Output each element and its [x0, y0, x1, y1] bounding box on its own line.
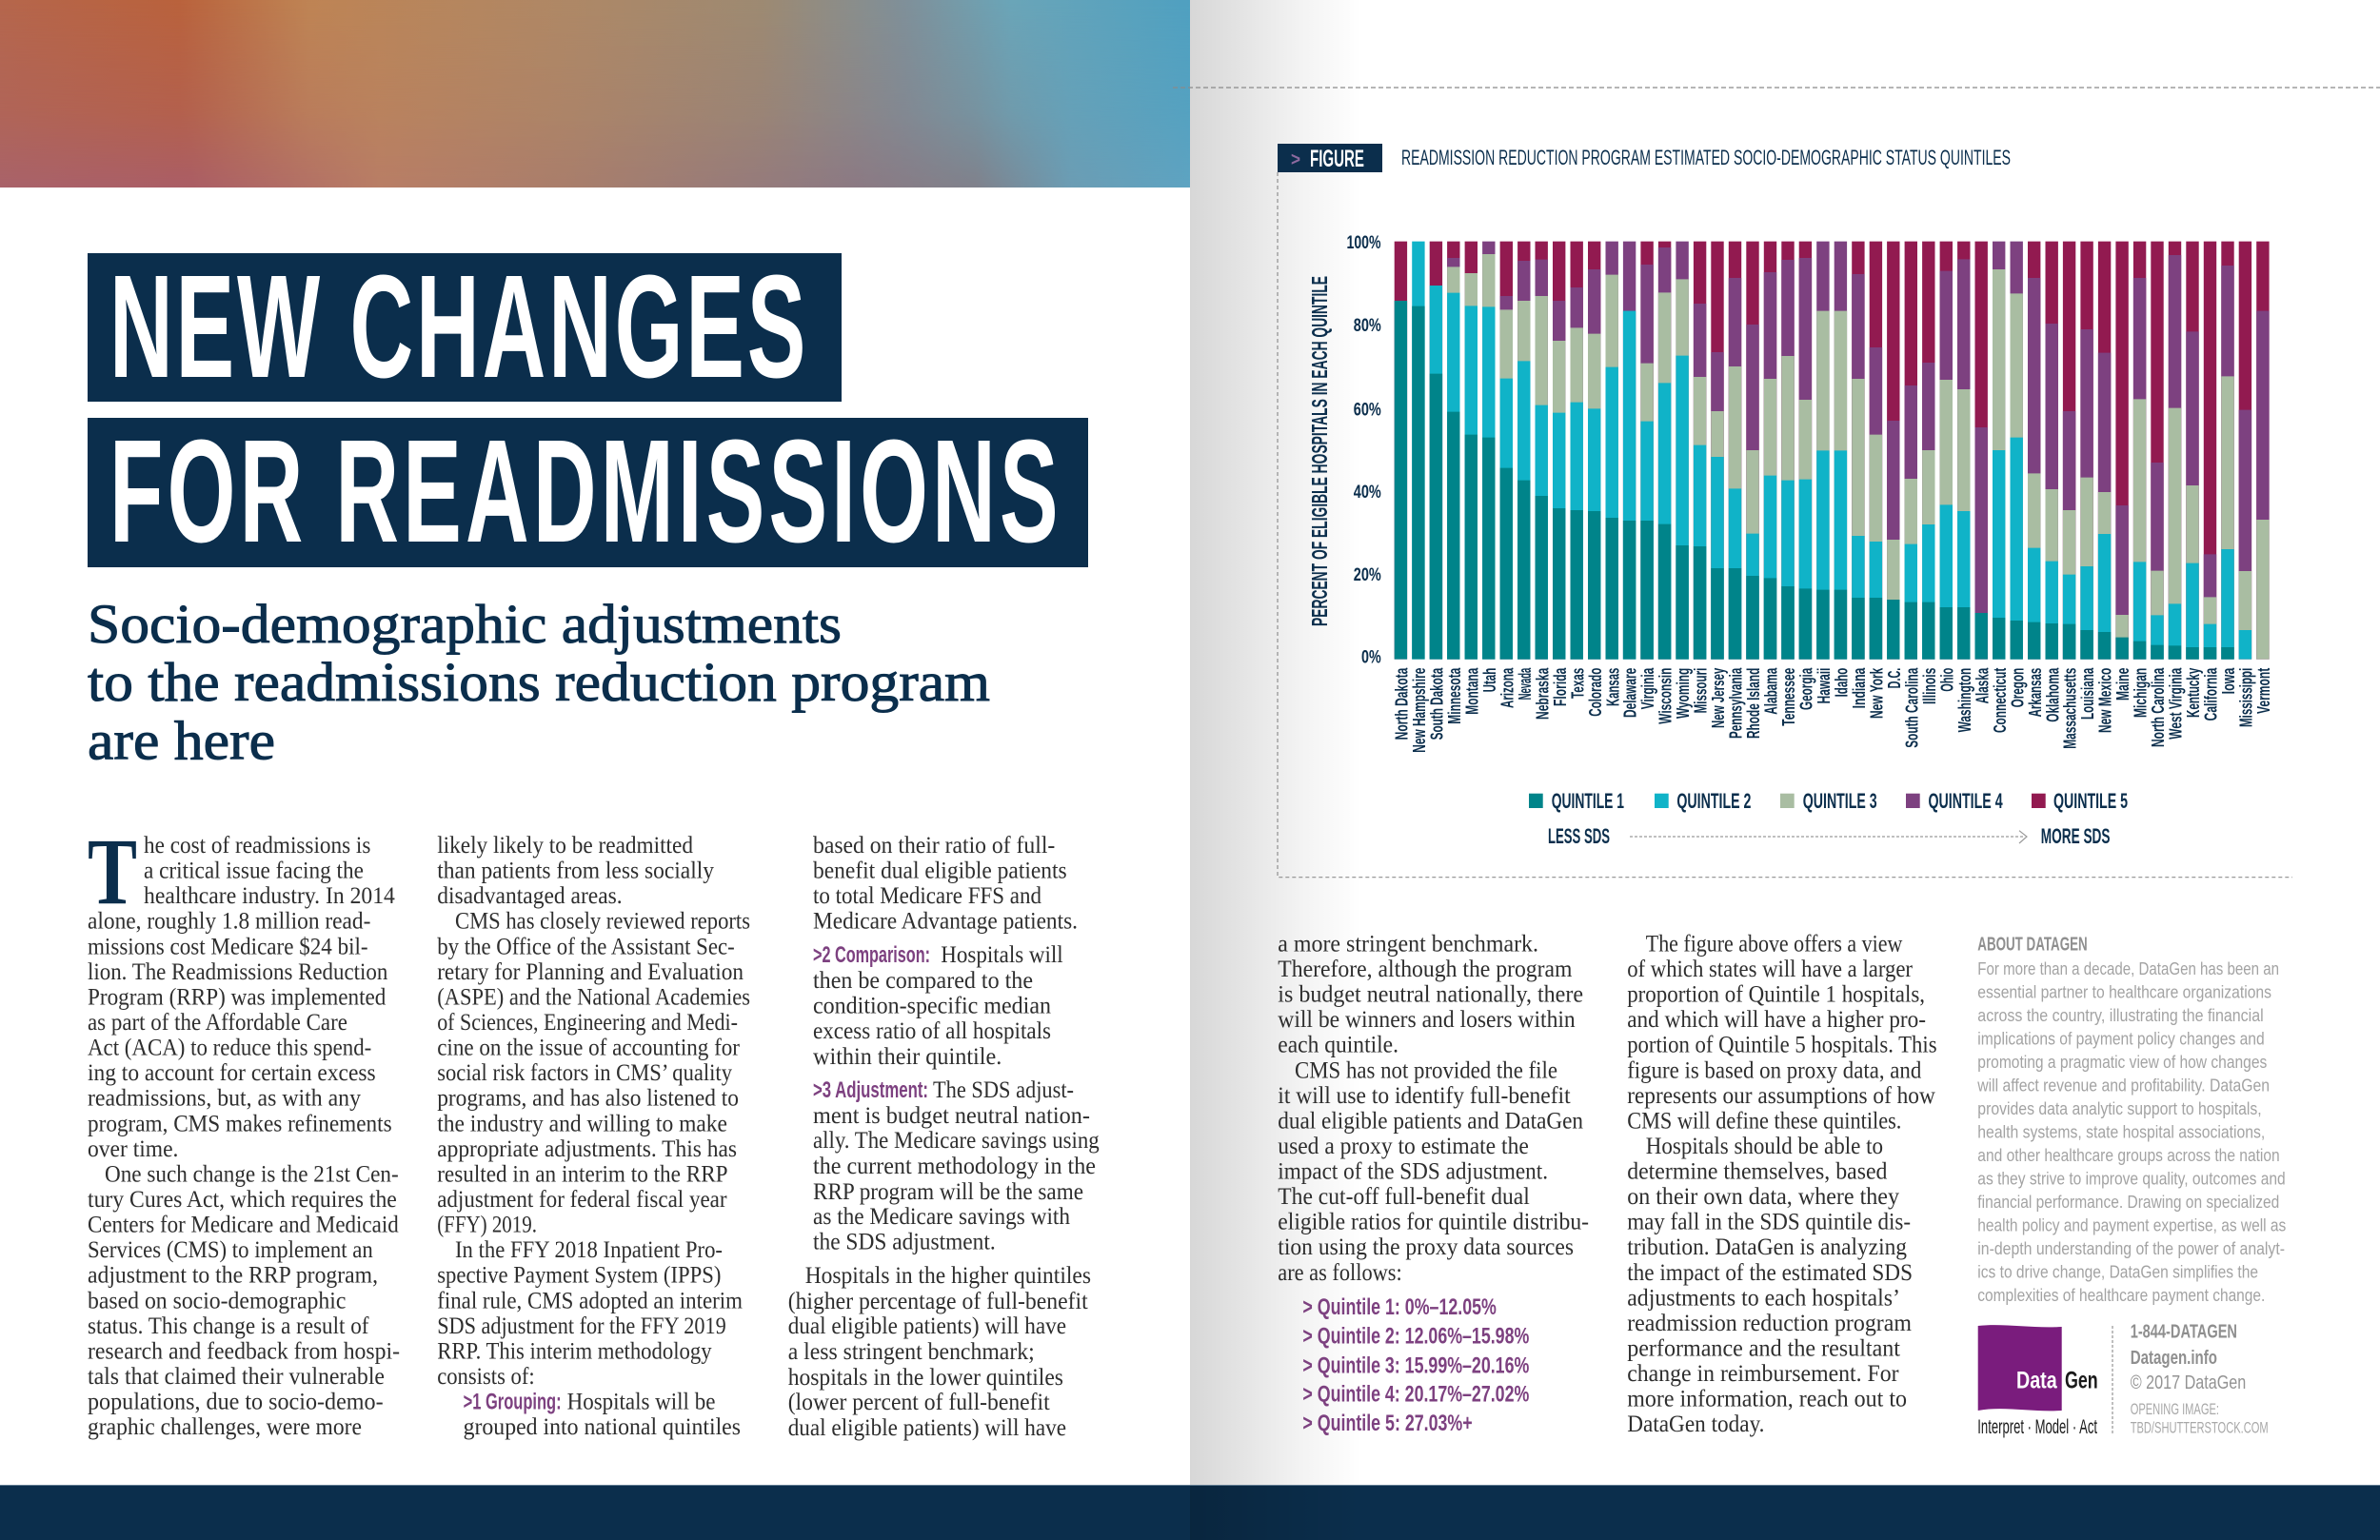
article column 1: tury Cures Act, which requires the	[88, 1187, 397, 1213]
article column 3: dual eligible patients) will have	[788, 1415, 1066, 1441]
state labels: Rhode Island	[1744, 668, 1763, 739]
bar: Alaska	[1974, 242, 1988, 660]
article column 1: over time.	[88, 1136, 178, 1162]
right page text column A: dual eligible patients and DataGen	[1278, 1108, 1583, 1134]
state labels: Minnesota	[1445, 667, 1464, 724]
right page text column A: a more stringent benchmark.	[1278, 931, 1538, 957]
right page text column B: more information, reach out to	[1627, 1387, 1907, 1412]
right page text column A: tion using the proxy data sources	[1278, 1234, 1574, 1260]
state labels: Oklahoma	[2043, 667, 2062, 722]
right page text column A: The cut-off full-benefit dual	[1278, 1184, 1530, 1210]
DataGen logo	[1977, 1325, 2098, 1438]
about body text: essential partner to healthcare organizations	[1977, 982, 2271, 1001]
article column 1: readmissions, but, as with any	[88, 1086, 361, 1112]
bar: Oklahoma	[2045, 242, 2058, 660]
article column 2: disadvantaged areas.	[437, 883, 623, 909]
article column 3: as the Medicare savings with	[813, 1204, 1070, 1230]
state labels: Wisconsin	[1656, 668, 1676, 724]
about body text: financial performance. Drawing on specialized	[1977, 1193, 2279, 1212]
quintile ranges list	[1302, 1294, 1529, 1436]
about body text: will affect revenue and profitability. DataGen	[1976, 1076, 2270, 1095]
quintile ranges list: > Quintile 1: 0%–12.05%	[1302, 1294, 1497, 1320]
bar: Nevada	[1517, 242, 1531, 660]
y axis labels: 0%	[1361, 648, 1381, 668]
state labels: Virginia	[1638, 667, 1657, 709]
bar: North Dakota	[1395, 242, 1407, 660]
article column 2: RRP. This interim methodology	[437, 1338, 712, 1364]
bar: Washington	[1957, 242, 1971, 660]
state labels: Florida	[1551, 667, 1570, 706]
legend: QUINTILE 1	[1552, 789, 1624, 813]
article column 1: ing to account for certain excess	[88, 1060, 376, 1086]
figure frame	[1278, 172, 2292, 878]
article column 3: RRP program will be the same	[813, 1179, 1083, 1205]
header image band	[0, 0, 1190, 188]
right page text column A: will be winners and losers within	[1278, 1007, 1576, 1033]
contact details: TBD/SHUTTERSTOCK.COM	[2131, 1419, 2269, 1437]
right page text column A: it will use to identify full-benefit	[1278, 1083, 1571, 1109]
about body text: across the country, illustrating the financial	[1977, 1006, 2264, 1025]
article column 2: retary for Planning and Evaluation	[437, 959, 744, 985]
article column 2: SDS adjustment for the FFY 2019	[437, 1313, 726, 1339]
about body text: ics to drive change, DataGen simplifies the	[1977, 1262, 2258, 1281]
SDS scale arrow: MORE SDS	[2041, 824, 2110, 848]
legend: QUINTILE 3	[1803, 789, 1877, 813]
state labels: Louisiana	[2078, 667, 2097, 720]
state labels: North Carolina	[2149, 667, 2168, 747]
quintile ranges list: > Quintile 4: 20.17%–27.02%	[1302, 1382, 1529, 1407]
legend: QUINTILE 2	[1676, 789, 1751, 813]
right page text column B: CMS will define these quintiles.	[1627, 1108, 1901, 1134]
about body text: in-depth understanding of the power of analyt-	[1977, 1239, 2285, 1258]
article column 1: alone, roughly 1.8 million read-	[88, 909, 370, 935]
bar: Rhode Island	[1746, 242, 1759, 660]
article column 3: hospitals in the lower quintiles	[788, 1365, 1063, 1391]
state labels: West Virginia	[2167, 667, 2186, 740]
state labels: New Mexico	[2096, 668, 2115, 733]
bottom navy band	[0, 1485, 2380, 1540]
bar: Louisiana	[2080, 242, 2093, 660]
article column 2: consists of:	[437, 1364, 535, 1390]
right page text column B: proportion of Quintile 1 hospitals,	[1627, 981, 1925, 1007]
state labels: New York	[1868, 667, 1887, 719]
article column 3: Medicare Advantage patients.	[813, 909, 1078, 935]
article column 1: status. This change is a result of	[88, 1313, 369, 1339]
about body text: provides data analytic support to hospitals,	[1977, 1099, 2262, 1118]
bar: Wisconsin	[1658, 242, 1671, 660]
article column 1: program, CMS makes refinements	[88, 1111, 392, 1136]
state labels: Illinois	[1920, 668, 1939, 704]
state labels: Mississippi	[2237, 668, 2256, 727]
article column 1: he cost of readmissions is	[144, 833, 370, 859]
article column 1: missions cost Medicare $24 bil-	[88, 934, 368, 959]
about body text	[1976, 959, 2286, 1305]
state labels: South Dakota	[1428, 667, 1447, 740]
SDS scale arrow	[1548, 824, 2110, 848]
article column 3: the current methodology in the	[813, 1154, 1096, 1179]
right page text column B: tribution. DataGen is analyzing	[1627, 1234, 1907, 1260]
bar: Mississippi	[2239, 242, 2251, 660]
state labels: Delaware	[1621, 668, 1640, 718]
right page text column B: DataGen today.	[1627, 1412, 1765, 1437]
article column 2: (FFY) 2019.	[437, 1213, 537, 1238]
article column 1: Centers for Medicare and Medicaid	[88, 1213, 399, 1238]
article column 3: (higher percentage of full-benefit	[788, 1289, 1088, 1314]
state labels: South Carolina	[1902, 667, 1921, 748]
bar: New Jersey	[1711, 242, 1724, 660]
title: FOR READMISSIONS	[109, 409, 1059, 573]
bar: West Virginia	[2169, 242, 2181, 660]
subtitle	[88, 593, 990, 772]
state labels: Indiana	[1850, 667, 1869, 708]
state labels	[1392, 667, 2273, 753]
about body text: health policy and payment expertise, as well as	[1977, 1215, 2286, 1234]
title: NEW CHANGES	[109, 245, 805, 408]
bar: Massachusetts	[2063, 242, 2075, 660]
state labels: Utah	[1480, 668, 1499, 692]
legend: QUINTILE 5	[2053, 789, 2128, 813]
quintile ranges list: > Quintile 5: 27.03%+	[1302, 1411, 1473, 1436]
article column 3: condition-specific median	[813, 994, 1051, 1019]
bar: New York	[1870, 242, 1882, 660]
state labels: Nevada	[1516, 667, 1535, 700]
right page text column A: is budget neutral nationally, there	[1278, 981, 1583, 1007]
article column 3: >2 Comparison:	[813, 942, 930, 968]
contact details: © 2017 DataGen	[2131, 1372, 2246, 1393]
bar: D.C.	[1887, 242, 1900, 660]
article column 3: to total Medicare FFS and	[813, 883, 1041, 909]
subtitle: are here	[88, 710, 275, 772]
article column 1: based on socio-demographic	[88, 1288, 346, 1313]
bar: Arkansas	[2028, 242, 2040, 660]
bar: South Dakota	[1430, 242, 1442, 660]
DataGen logo: Data	[2016, 1368, 2058, 1394]
bar: Ohio	[1940, 242, 1953, 660]
bar: Illinois	[1922, 242, 1935, 660]
about body text: and other healthcare groups across the nation	[1977, 1146, 2280, 1165]
article column 2: (ASPE) and the National Academies	[437, 984, 750, 1010]
right page text column B: and which will have a higher pro-	[1627, 1007, 1926, 1033]
right page text column B: The figure above offers a view	[1646, 931, 1902, 957]
bar: Colorado	[1588, 242, 1600, 660]
article column 1: Act (ACA) to reduce this spend-	[88, 1036, 371, 1061]
article column 1: populations, due to socio-demo-	[88, 1390, 384, 1414]
bar: Missouri	[1694, 242, 1706, 660]
bar: California	[2204, 242, 2216, 660]
state labels: Pennsylvania	[1727, 667, 1746, 739]
about body text: promoting a pragmatic view of how changes	[1977, 1053, 2267, 1072]
state labels: New Jersey	[1709, 668, 1728, 728]
legend	[1529, 789, 2128, 813]
article column 2: Hospitals will be	[567, 1390, 715, 1414]
bar: Pennsylvania	[1729, 242, 1741, 660]
right page text column B: on their own data, where they	[1627, 1184, 1899, 1210]
right page text column B: may fall in the SDS quintile dis-	[1627, 1210, 1911, 1235]
article column 2: the industry and willing to make	[437, 1111, 727, 1136]
bar: Connecticut	[1993, 242, 2005, 660]
subtitle: Socio-demographic adjustments	[88, 593, 842, 655]
article column 1: a critical issue facing the	[144, 859, 364, 884]
article column 2: cine on the issue of accounting for	[437, 1036, 741, 1061]
article column 2: In the FFY 2018 Inpatient Pro-	[455, 1237, 723, 1263]
article column 3: a less stringent benchmark;	[788, 1339, 1035, 1365]
article column 2: final rule, CMS adopted an interim	[437, 1288, 743, 1313]
contact details: 1-844-DATAGEN	[2131, 1321, 2237, 1343]
right page text column B: the impact of the estimated SDS	[1627, 1260, 1913, 1286]
y axis title: PERCENT OF ELIGIBLE HOSPITALS IN EACH QUINTILE	[1307, 276, 1332, 626]
bar: Minnesota	[1447, 242, 1460, 660]
state labels: Iowa	[2219, 667, 2238, 694]
bar: Kansas	[1605, 242, 1618, 660]
article column 3: benefit dual eligible patients	[813, 859, 1067, 884]
right page text column B: determine themselves, based	[1627, 1158, 1888, 1184]
y axis labels: 60%	[1354, 401, 1381, 421]
state labels: Kansas	[1603, 668, 1622, 706]
state labels: North Dakota	[1392, 667, 1411, 740]
bar: Maine	[2115, 242, 2129, 660]
state labels: Alaska	[1973, 667, 1992, 703]
state labels: Hawaii	[1815, 668, 1834, 703]
contact details	[2131, 1321, 2269, 1437]
figure tag: FIGURE	[1310, 147, 1364, 172]
bar: Georgia	[1799, 242, 1812, 660]
subtitle: to the readmissions reduction program	[88, 651, 990, 713]
article column 3: excess ratio of all hospitals	[813, 1018, 1051, 1044]
state labels: Arizona	[1497, 667, 1517, 708]
article column 3: the SDS adjustment.	[813, 1230, 996, 1255]
figure title: READMISSION REDUCTION PROGRAM ESTIMATED SOCIO-DEMOGRAPHIC STATUS QUINTILES	[1401, 146, 2011, 169]
bar: New Mexico	[2098, 242, 2111, 660]
DataGen logo: Interpret · Model · Act	[1977, 1416, 2097, 1438]
state labels: Wyoming	[1674, 668, 1693, 719]
state labels: Vermont	[2254, 668, 2273, 714]
article column 3: based on their ratio of full-	[813, 833, 1055, 859]
article column 1: graphic challenges, were more	[88, 1414, 362, 1440]
drop cap: T	[88, 819, 137, 924]
article column 3: ally. The Medicare savings using	[813, 1128, 1100, 1154]
about heading: ABOUT DATAGEN	[1977, 934, 2088, 956]
article column 1: tals that claimed their vulnerable	[88, 1364, 385, 1390]
article column 3: Hospitals will	[941, 942, 1063, 968]
article column 1: as part of the Affordable Care	[88, 1010, 347, 1036]
article column 2	[437, 833, 750, 1440]
y axis labels	[1346, 233, 1381, 668]
right page text column B: Hospitals should be able to	[1646, 1134, 1883, 1159]
quintile ranges list: > Quintile 2: 12.06%–15.98%	[1302, 1324, 1529, 1350]
bar: Iowa	[2221, 242, 2234, 660]
state labels: Nebraska	[1533, 667, 1552, 720]
bar: North Carolina	[2151, 242, 2164, 660]
article column 1: healthcare industry. In 2014	[144, 883, 395, 909]
bar: Florida	[1553, 242, 1565, 660]
DataGen logo: Gen	[2065, 1368, 2098, 1394]
contact details: Datagen.info	[2131, 1347, 2217, 1369]
right page text column A	[1278, 931, 1589, 1286]
bar: Delaware	[1623, 242, 1636, 660]
figure tag: >	[1291, 149, 1300, 170]
article column 2: >1 Grouping:	[464, 1390, 562, 1414]
right page text column A: used a proxy to estimate the	[1278, 1134, 1529, 1159]
state labels: California	[2202, 667, 2221, 721]
bar: Indiana	[1852, 242, 1865, 660]
figure panel	[1278, 144, 2292, 878]
state labels: Connecticut	[1991, 668, 2010, 733]
about body text: For more than a decade, DataGen has been an	[1977, 959, 2279, 978]
article column 3: >3 Adjustment:	[813, 1077, 928, 1103]
right page text column A: each quintile.	[1278, 1033, 1398, 1058]
article column 3: dual eligible patients) will have	[788, 1313, 1066, 1339]
state labels: Oregon	[2008, 668, 2027, 707]
article column 2: spective Payment System (IPPS)	[437, 1263, 722, 1289]
stacked bar chart	[1400, 242, 2263, 660]
right page text column A: eligible ratios for quintile distribu-	[1278, 1210, 1589, 1235]
contact details: OPENING IMAGE:	[2131, 1400, 2219, 1418]
article column 1: research and feedback from hospi-	[88, 1338, 400, 1364]
bar: Arizona	[1500, 242, 1513, 660]
article column 2: CMS has closely reviewed reports	[455, 909, 750, 935]
right page text column A: are as follows:	[1278, 1260, 1402, 1286]
state labels: Georgia	[1797, 667, 1816, 710]
right page text column B: readmission reduction program	[1627, 1311, 1913, 1336]
bar: South Carolina	[1905, 242, 1917, 660]
y axis labels: 80%	[1354, 316, 1381, 336]
article column 1	[88, 819, 400, 1440]
state labels: Idaho	[1832, 668, 1851, 697]
bar: Michigan	[2133, 242, 2146, 660]
state labels: Texas	[1568, 668, 1587, 699]
state labels: Ohio	[1937, 668, 1956, 692]
title	[88, 245, 1088, 573]
SDS scale arrow: LESS SDS	[1548, 824, 1610, 848]
y axis labels: 20%	[1354, 565, 1381, 585]
right page text column B: portion of Quintile 5 hospitals. This	[1627, 1033, 1937, 1058]
about body text: health systems, state hospital associations,	[1977, 1122, 2265, 1141]
right page text column B: adjustments to each hospitals’	[1627, 1285, 1900, 1311]
article column 1: Program (RRP) was implemented	[88, 984, 387, 1010]
article column 2: adjustment for federal fiscal year	[437, 1187, 727, 1213]
state labels: Michigan	[2132, 668, 2151, 718]
article column 2: programs, and has also listened to	[437, 1086, 739, 1112]
about DataGen block	[1976, 934, 2286, 1438]
state labels: Alabama	[1762, 667, 1781, 715]
article column 2: social risk factors in CMS’ quality	[437, 1060, 732, 1086]
right page text column B: represents our assumptions of how	[1627, 1083, 1935, 1109]
article column 2: likely likely to be readmitted	[437, 833, 693, 859]
article column 2: than patients from less socially	[437, 859, 714, 884]
state labels: Washington	[1955, 668, 1974, 732]
article column 3: The SDS adjust-	[933, 1077, 1074, 1103]
article column 1: adjustment to the RRP program,	[88, 1263, 378, 1289]
article column 1: One such change is the 21st Cen-	[105, 1161, 399, 1187]
bar: Montana	[1465, 242, 1478, 660]
about body text: as they strive to improve quality, outcomes and	[1977, 1169, 2286, 1188]
right page text column A: Therefore, although the program	[1278, 957, 1573, 982]
right page text column B: of which states will have a larger	[1627, 957, 1914, 982]
article column 2: of Sciences, Engineering and Medi-	[437, 1010, 738, 1036]
state labels: Colorado	[1586, 668, 1605, 717]
article column 2: by the Office of the Assistant Sec-	[437, 934, 735, 959]
bar: Wyoming	[1676, 242, 1689, 660]
y axis labels: 40%	[1354, 483, 1381, 503]
right page text column B: figure is based on proxy data, and	[1627, 1057, 1922, 1083]
article column 2: resulted in an interim to the RRP	[437, 1161, 728, 1187]
bar: Hawaii	[1816, 242, 1830, 660]
article column 3: ment is budget neutral nation-	[813, 1103, 1090, 1129]
article column 3: within their quintile.	[813, 1044, 1002, 1070]
figure tag	[1278, 144, 1382, 172]
bar: Nebraska	[1535, 242, 1548, 660]
bar: Virginia	[1640, 242, 1654, 660]
article column 1: lion. The Readmissions Reduction	[88, 959, 388, 985]
quintile ranges list: > Quintile 3: 15.99%–20.16%	[1302, 1353, 1529, 1378]
article column 3: Hospitals in the higher quintiles	[805, 1263, 1091, 1289]
bar: Oregon	[2010, 242, 2023, 660]
state labels: Massachusetts	[2061, 668, 2080, 749]
page gutter shadow	[1190, 0, 1361, 1485]
article column 1: Services (CMS) to implement an	[88, 1237, 373, 1263]
bar: Kentucky	[2186, 242, 2199, 660]
bar: Vermont	[2256, 242, 2270, 660]
bar: Tennessee	[1781, 242, 1795, 660]
right page text column A: impact of the SDS adjustment.	[1278, 1158, 1548, 1184]
bar: New Hampshire	[1412, 242, 1425, 660]
state labels: Tennessee	[1779, 668, 1798, 726]
bar: Idaho	[1835, 242, 1847, 660]
right page text column A: CMS has not provided the file	[1295, 1057, 1557, 1083]
right page text column B: performance and the resultant	[1627, 1335, 1900, 1361]
state labels: New Hampshire	[1410, 668, 1429, 753]
article column 3	[788, 833, 1100, 1441]
bar: Texas	[1570, 242, 1583, 660]
bar: Utah	[1482, 242, 1496, 660]
about body text: complexities of healthcare payment change.	[1977, 1286, 2265, 1305]
bar: Alabama	[1764, 242, 1776, 660]
right page text column B	[1627, 931, 1937, 1437]
about body text: implications of payment policy changes and	[1977, 1029, 2265, 1048]
state labels: Missouri	[1692, 668, 1711, 713]
state labels: Montana	[1462, 667, 1481, 715]
legend: QUINTILE 4	[1929, 789, 2003, 813]
article column 2: appropriate adjustments. This has	[437, 1136, 737, 1162]
state labels: Arkansas	[2026, 668, 2045, 717]
article column 3: (lower percent of full-benefit	[788, 1390, 1050, 1415]
state labels: Kentucky	[2184, 668, 2203, 718]
article column 2: grouped into national quintiles	[464, 1414, 741, 1440]
right page text column B: change in reimbursement. For	[1627, 1361, 1899, 1387]
state labels: Maine	[2113, 668, 2132, 701]
article column 3: then be compared to the	[813, 968, 1033, 994]
y axis labels: 100%	[1346, 233, 1381, 253]
state labels: D.C.	[1885, 668, 1904, 688]
